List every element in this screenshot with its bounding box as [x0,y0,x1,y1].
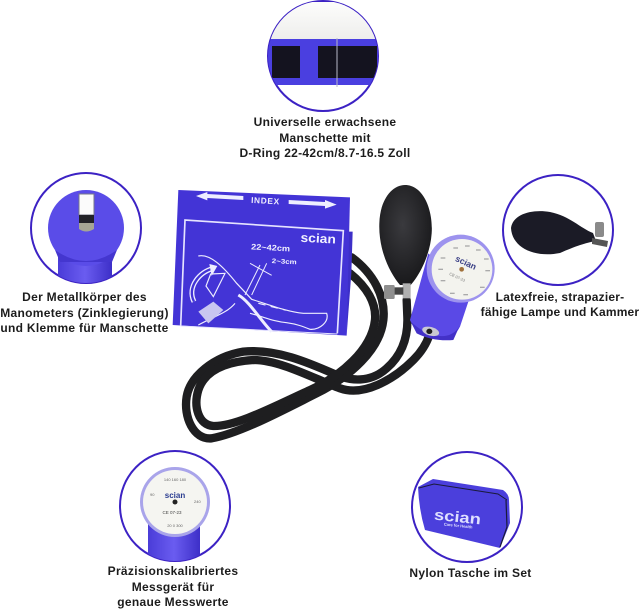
caption: manometer clip: Manometers (Zinklegierung) [0,306,169,320]
circle: latex bulb [503,175,613,285]
cuff index label: INDEX [251,195,280,206]
caption: latex bulb [480,290,639,318]
caption: manometer clip: Der Metallkörper des [22,290,147,304]
main product photo: CE 07-23 [449,271,467,283]
tubing [186,257,429,438]
caption: cuff: Universelle erwachsene [254,115,396,129]
circle: precision gauge: scian [165,491,185,500]
cuff arm diagram [192,256,327,332]
caption: precision gauge: Präzisionskalibriertes [108,564,238,578]
main product photo [173,185,495,438]
cuff size labels: 22~42cm [251,242,290,253]
circle: manometer clip [31,173,141,290]
circle: nylon case [412,452,522,562]
circle: nylon case: Care for Health [444,522,473,530]
caption: latex bulb: fähige Lampe und Kammer [481,304,639,318]
caption: latex bulb: Latexfreie, strapazier- [496,290,624,304]
cuff back flap [347,232,353,335]
caption: precision gauge: genaue Messwerte [117,595,229,609]
cuff [173,190,350,336]
main product photo: scian [454,253,478,272]
caption: manometer clip [0,290,169,335]
circle: precision gauge: 20 0 300 [167,523,184,528]
caption: cuff: Manschette mit [279,130,371,144]
circle: cuff detail [267,0,379,112]
caption: cuff: D-Ring 22-42cm/8.7-16.5 Zoll [239,146,411,160]
caption: cuff [239,115,411,160]
caption: precision gauge [108,564,238,609]
circle: precision gauge: 140 160 180 [164,477,187,482]
valve [403,283,411,298]
cuff brand: scian [300,231,336,247]
caption: manometer clip: und Klemme für Manschette [0,321,169,335]
main product photo: 2~3cm [272,258,297,266]
circle: precision gauge: 90 [150,492,155,497]
caption: nylon case: Nylon Tasche im Set [409,566,532,580]
circle: nylon case: scian [433,507,482,528]
circle: precision gauge: CE 07-23 [162,510,182,515]
circle: precision gauge [120,451,230,565]
caption: precision gauge: Messgerät für [132,580,214,594]
gauge dial [427,235,495,303]
gauge body [410,253,470,339]
bulb [379,185,432,285]
circle: precision gauge: 240 [194,499,201,504]
